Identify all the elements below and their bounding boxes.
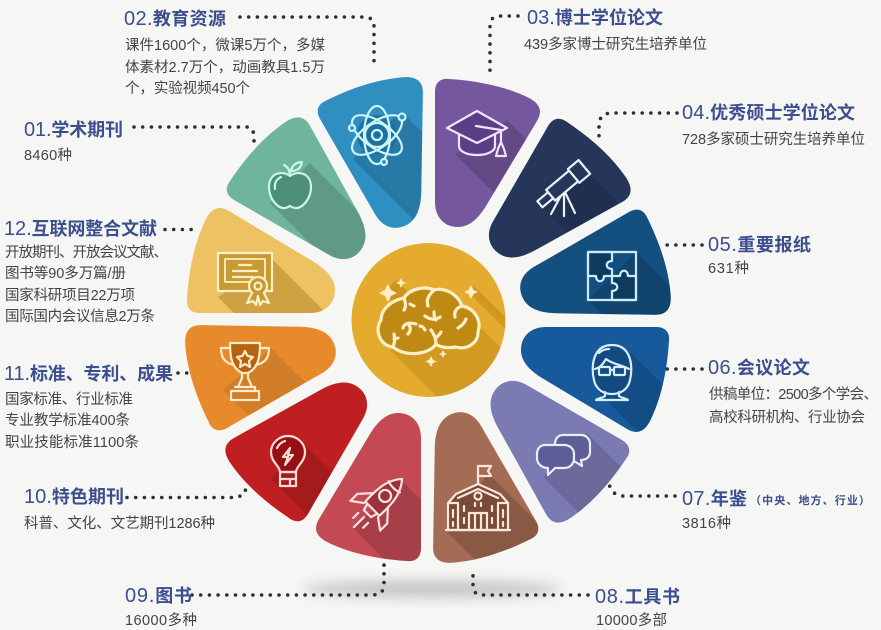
label 11: 职业技能标准1100条 xyxy=(5,434,139,451)
label 03: 03.博士学位论文 xyxy=(527,7,663,29)
panel: segment 10 special journals xyxy=(225,382,368,522)
panel: segment 12 internet integrated documents xyxy=(187,208,335,314)
label 02 xyxy=(124,8,326,97)
panel: segment 06 conference papers xyxy=(521,327,670,432)
label 03 xyxy=(524,7,707,53)
label 01 xyxy=(24,119,123,164)
ground shadow xyxy=(302,580,562,598)
label 04: 728多家硕士研究生培养单位 xyxy=(682,131,865,148)
label 08: 08.工具书 xyxy=(595,586,680,608)
connector 12 xyxy=(165,228,194,231)
connector 08 xyxy=(473,570,588,595)
label 11 xyxy=(4,363,173,451)
label 09: 16000多种 xyxy=(125,612,197,629)
label 02: 02.教育资源 xyxy=(124,8,226,30)
panel: segment 04 master theses xyxy=(488,118,631,258)
label 04 xyxy=(682,102,865,148)
connector 09 xyxy=(192,558,384,595)
label 12: 图书等90多万篇/册 xyxy=(5,264,126,282)
panel: segment 03 doctoral dissertations xyxy=(435,79,540,227)
connector 03 xyxy=(490,16,518,74)
label 12: 12.互联网整合文献 xyxy=(4,218,157,240)
icon: rocket xyxy=(339,464,417,542)
icon: atom xyxy=(346,106,408,165)
connector 05 xyxy=(664,243,702,247)
icon: graduation cap xyxy=(447,111,507,156)
label 11: 国家标准、行业标准 xyxy=(5,391,133,408)
label 10 xyxy=(24,486,215,532)
connector 07 xyxy=(609,485,675,496)
label 10: 10.特色期刊 xyxy=(24,486,124,508)
label 08 xyxy=(595,586,680,629)
panel: segment 08 reference books xyxy=(433,412,538,563)
label 12 xyxy=(4,218,168,325)
icon: puzzle xyxy=(588,252,636,300)
connector 11 xyxy=(178,371,190,375)
label 09: 09.图书 xyxy=(125,585,192,607)
label 06: 06.会议论文 xyxy=(708,357,810,379)
label 09 xyxy=(125,585,197,629)
icon: speech bubbles xyxy=(537,435,590,475)
connector 04 xyxy=(599,113,677,143)
icon: person with glasses xyxy=(593,345,631,400)
label 12: 国家科研项目22万项 xyxy=(5,287,135,304)
connector 01 xyxy=(134,127,254,149)
label 07 xyxy=(682,488,870,532)
label 06: 高校科研机构、行业协会 xyxy=(709,409,865,426)
label 12: 开放期刊、开放会议文献、 xyxy=(5,244,168,261)
icon: brain xyxy=(378,278,479,367)
label 08: 10000多部 xyxy=(596,612,667,629)
connector 06 xyxy=(664,367,702,371)
label 11: 11.标准、专利、成果 xyxy=(4,363,173,385)
panel: segment 11 standards, patents, results xyxy=(185,325,336,430)
label 02: 个，实验视频450个 xyxy=(125,80,250,97)
label 11: 专业教学标准400条 xyxy=(5,412,130,429)
label 04: 04.优秀硕士学位论文 xyxy=(682,102,855,124)
label 10: 科普、文化、文艺期刊1286种 xyxy=(24,515,215,532)
label 01: 8460种 xyxy=(24,147,72,164)
label 12: 国际国内会议信息2万条 xyxy=(5,308,155,325)
label 06 xyxy=(708,357,878,426)
panel: segment 07 yearbooks xyxy=(490,380,630,523)
label 02: 课件1600个，微课5万个，多媒 xyxy=(125,37,326,54)
label 05: 05.重要报纸 xyxy=(708,234,811,256)
panel: segment 09 books xyxy=(316,413,422,561)
label 05 xyxy=(708,234,811,277)
icon: certificate xyxy=(218,253,272,305)
label 06: 供稿单位：2500多个学会、 xyxy=(709,386,878,403)
icon: light bulb xyxy=(271,436,305,486)
icon: telescope xyxy=(534,160,590,216)
label 07: 3816种 xyxy=(682,515,731,532)
connector 02 xyxy=(240,17,374,68)
panel: segment 02 education resources xyxy=(318,77,423,228)
label 07: （中央、地方、行业） xyxy=(750,493,870,507)
center circle with brain xyxy=(352,243,506,397)
label 05: 631种 xyxy=(708,260,749,277)
icon: school building xyxy=(446,466,510,530)
panel: segment 05 newspapers xyxy=(520,210,671,315)
icon: apple xyxy=(269,162,311,208)
label 01: 01.学术期刊 xyxy=(24,119,123,141)
panel: segment 01 academic journals xyxy=(226,117,366,260)
icon: trophy xyxy=(221,343,269,400)
label 02: 体素材2.7万个，动画教具1.5万 xyxy=(125,59,325,76)
label 03: 439多家博士研究生培养单位 xyxy=(524,36,707,53)
label 07: 07.年鉴 xyxy=(682,488,747,510)
connector 10 xyxy=(127,487,247,498)
